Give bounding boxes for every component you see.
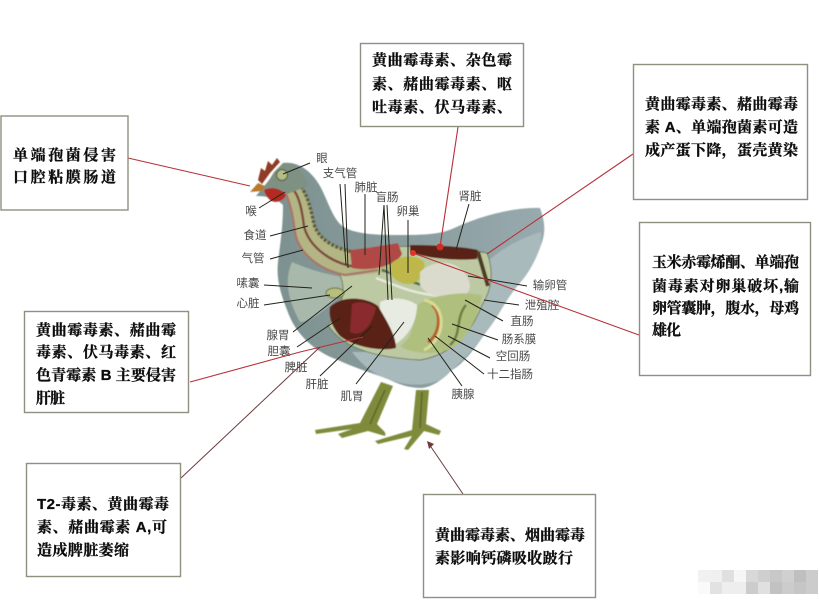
callout: liver: 色青霉素 B 主要侵害 [36, 366, 176, 384]
wattle [264, 188, 286, 202]
comb [258, 158, 280, 184]
callout: calcium and phosphorus [424, 494, 596, 598]
blurred watermark mosaic [698, 570, 818, 594]
callout leader lines [128, 127, 639, 494]
anatomy labels: 眼 [316, 152, 328, 165]
callout: spleen [26, 464, 180, 576]
crop area [288, 262, 352, 322]
callout: top toxins: 素、赭曲霉毒素、呕 [372, 75, 512, 93]
anatomy labels: 肠系膜 [502, 333, 536, 346]
right leg [375, 390, 441, 450]
callout: calcium and phosphorus: 素影响钙磷吸收跛行 [435, 549, 573, 567]
anatomy labels: 直肠 [510, 314, 534, 328]
anatomy labels: 空回肠 [496, 349, 530, 363]
chicken anatomy illustration [250, 158, 544, 450]
body silhouette [256, 163, 544, 388]
anatomy labels: 胰腺 [452, 387, 475, 401]
callout: top toxins: 黄曲霉毒素、杂色霉 [372, 51, 512, 69]
oviduct [420, 263, 470, 298]
callout: egg production: 黄曲霉毒素、赭曲霉毒 [645, 95, 798, 113]
lower body light area [352, 232, 541, 385]
callout: spleen: 素、赭曲霉素 A,可 [37, 518, 167, 536]
liver [330, 299, 396, 349]
anatomy labels: 喉 [245, 205, 257, 218]
heart [326, 288, 344, 298]
anatomy labels: 肺脏 [354, 180, 378, 194]
lung [350, 243, 402, 269]
callout: oral mucosa: 口腔粘膜肠道 [13, 168, 116, 186]
callout: ovary damage: 玉米赤霉烯酮、单端孢 [652, 253, 799, 271]
anatomy labels: 卵巢 [396, 205, 420, 218]
anatomy labels [236, 152, 567, 403]
callout: liver [24, 312, 188, 412]
callout: egg production: 素 A、单端孢菌素可造 [645, 118, 798, 136]
anatomy labels: 嗉囊 [236, 276, 260, 290]
callout: ovary damage: 卵管囊肿，腹水，母鸡 [652, 299, 799, 318]
callout: spleen: 造成脾脏萎缩 [37, 541, 129, 559]
body cavity [328, 246, 491, 360]
neck structures [280, 180, 388, 276]
anatomy labels: 泄殖腔 [525, 298, 559, 312]
intestines [400, 293, 482, 353]
callout: liver: 毒素、伏马毒素、红 [36, 343, 176, 361]
anatomy labels: 盲肠 [376, 190, 398, 204]
callout: top toxins: 吐毒素、伏马毒素、 [372, 98, 512, 116]
anatomy labels: 肾脏 [458, 189, 482, 203]
anatomy labels: 脾脏 [284, 360, 308, 374]
anatomy labels: 气管 [242, 251, 264, 265]
callout: spleen: T2-毒素、黄曲霉毒 [37, 495, 169, 513]
ovary [388, 256, 424, 284]
anatomy pointer lines [259, 163, 527, 386]
callout: calcium and phosphorus: 黄曲霉毒素、烟曲霉毒 [435, 526, 585, 544]
callout: oral mucosa: 单端孢菌侵害 [13, 146, 116, 164]
kidney [410, 245, 478, 260]
anatomy labels: 肌胃 [340, 390, 364, 403]
callout: egg production: 成产蛋下降，蛋壳黄染 [645, 141, 798, 160]
callout: ovary damage [640, 222, 810, 376]
anatomy labels: 胆囊 [268, 344, 291, 358]
head [262, 163, 308, 196]
anatomy labels: 支气管 [323, 166, 357, 180]
anatomy labels: 食道 [244, 228, 267, 242]
callout: top toxins [360, 44, 524, 126]
callout: liver: 黄曲霉毒素、赭曲霉 [36, 321, 176, 339]
left leg [315, 382, 393, 438]
gizzard [380, 298, 417, 346]
callout: oral mucosa [1, 116, 128, 210]
anatomy labels: 十二指肠 [487, 367, 533, 381]
callout: ovary damage: 菌毒素对卵巢破坏,输 [652, 277, 799, 295]
callout: ovary damage: 雄化 [652, 321, 681, 339]
callout: liver: 肝脏 [36, 389, 65, 407]
beak [250, 183, 265, 192]
anatomy labels: 肝脏 [306, 377, 328, 391]
callout: egg production [634, 64, 808, 200]
anatomy labels: 腺胃 [266, 328, 290, 342]
anatomy labels: 心脏 [236, 296, 260, 310]
anatomy labels: 输卵管 [533, 278, 567, 292]
